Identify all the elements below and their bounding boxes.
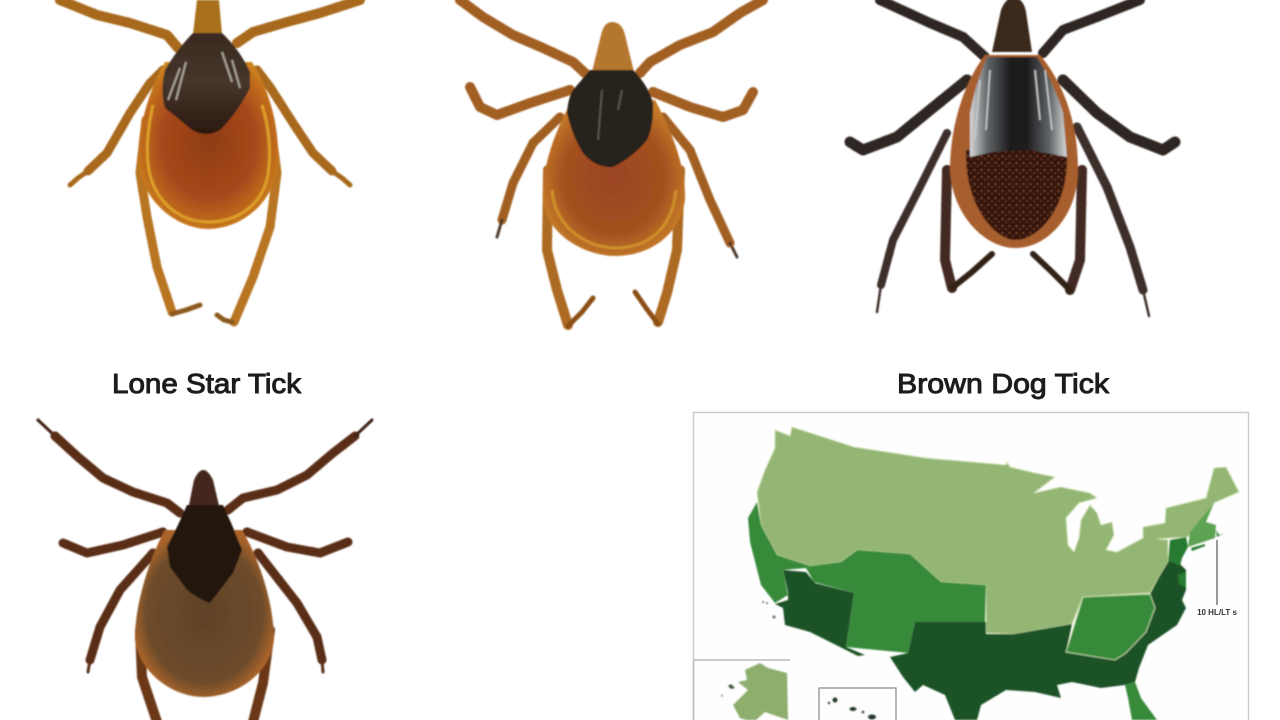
region: northern light green (757, 427, 1239, 634)
abdomen (543, 100, 685, 256)
callout label: 10 HL/LT s (1197, 608, 1237, 617)
map: US tick range (748, 427, 1239, 720)
scutum (162, 33, 250, 134)
region: south dark green (890, 556, 1186, 720)
scutum streaks (975, 70, 1052, 140)
callout leader line (1216, 540, 1218, 605)
tick: top right specimen (850, 0, 1175, 316)
region: New England green (1188, 503, 1216, 547)
tick: bottom left specimen (38, 420, 372, 720)
Channel Islands (762, 601, 776, 618)
map frame (694, 412, 1248, 720)
legs (460, 0, 763, 326)
Florida (1125, 682, 1157, 720)
rim (147, 105, 270, 222)
scutum sheen (598, 90, 622, 140)
inset: Alaska frame (694, 660, 790, 720)
scutum (167, 505, 242, 603)
leg joints (60, 0, 360, 322)
Cape Cod (1216, 530, 1224, 537)
capitulum (992, 0, 1032, 52)
leg joints (850, 0, 1175, 316)
inset: Hawaii frame (819, 688, 896, 720)
Delmarva (1178, 572, 1186, 588)
Long Island (1191, 544, 1205, 551)
region: western and plains medium green (748, 502, 986, 653)
legs (60, 0, 360, 322)
scutum (567, 70, 653, 167)
scutum sheen (168, 52, 240, 100)
inset: Hawaii islands (828, 698, 876, 720)
leg joints (460, 0, 763, 326)
region: southwest dark green (775, 570, 865, 656)
legs (850, 0, 1175, 316)
speckled opisthosoma (966, 150, 1067, 240)
region: mid-Atlantic green (1168, 537, 1188, 566)
tick: top center specimen (460, 0, 763, 326)
region: southeast medium green (1066, 594, 1155, 660)
leg joints (38, 420, 372, 720)
capitulum (193, 0, 222, 34)
abdomen (950, 55, 1078, 248)
abdomen (139, 62, 278, 229)
legs (38, 420, 372, 720)
abdomen (135, 530, 274, 697)
inset: Alaska (721, 663, 788, 720)
capitulum (592, 22, 634, 72)
capitulum (188, 470, 220, 510)
label: Brown Dog Tick: Brown Dog Tick (897, 368, 1110, 399)
tick: top left specimen (60, 0, 360, 322)
rim (552, 190, 676, 248)
scutum (970, 57, 1067, 157)
label: Lone Star Tick: Lone Star Tick (112, 368, 302, 399)
